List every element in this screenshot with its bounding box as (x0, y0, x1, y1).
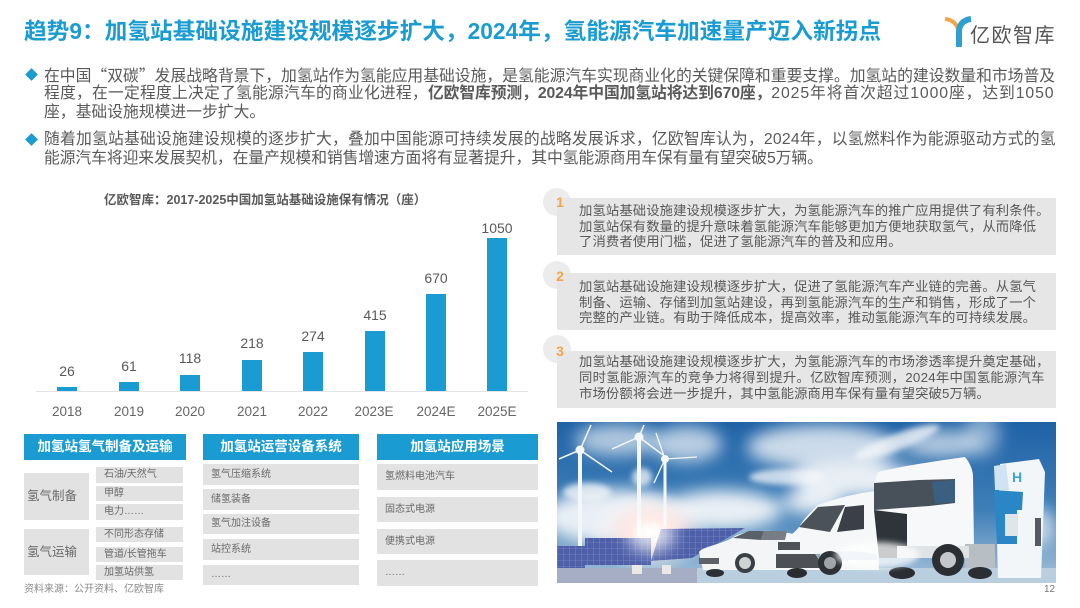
item: 管道/长管拖车 (104, 549, 167, 560)
bullet 2 text: 能源汽车将迎来发展契机，在量产规模和销售增速方面将有显著提升，其中氢能源商用车保有量有望突破5万辆。 (44, 150, 823, 167)
value 1050: 1050 (481, 220, 513, 236)
item (203, 514, 359, 534)
icon: car (699, 531, 797, 577)
logo: 亿欧智库 (944, 16, 1056, 47)
item (377, 464, 538, 490)
item: …… (385, 567, 405, 578)
bar 2019 (119, 382, 139, 391)
value 61: 61 (121, 358, 137, 374)
bullet 1 text: 座，基础设施规模进一步扩大。 (44, 104, 265, 121)
item: 石油/天然气 (104, 469, 157, 480)
item: 固态式电源 (385, 504, 435, 515)
panel: application scenarios (377, 434, 538, 586)
callout 1 text box: 加氢站保有数量的提升意味着氢能源汽车能够更加方便地获取氢气，从而降低 (579, 218, 1036, 234)
bar 2018 (57, 387, 77, 391)
item (377, 560, 538, 586)
icon: hydrogen pump (994, 459, 1045, 578)
item (203, 539, 359, 560)
item (96, 565, 183, 580)
callout 3 (543, 335, 1056, 408)
bar 2023E (365, 331, 385, 391)
bullet 1 text: 程度，在一定程度上决定了氢能源汽车的商业化进程，亿欧智库预测，2024年中国加氢站将达到670座，2025年将首次超过1000座，达到1050 (44, 85, 1054, 102)
item: 氢气压缩系统 (211, 469, 271, 480)
item (96, 467, 183, 483)
callout 2 text box: 制备、运输、存储到加氢站建设，再到氢能源汽车的生产和销售，形成了一个 (579, 294, 1036, 310)
value 26: 26 (59, 363, 75, 379)
icon: solar panels (557, 528, 745, 583)
item (377, 529, 538, 554)
intro bullet 1 (25, 63, 1055, 121)
group: hydrogen transport: 氢气运输 (27, 545, 77, 559)
callout 2 text box: 加氢站基础设施建设规模逐步扩大，促进了氢能源汽车产业链的完善。从氢气 (579, 279, 1036, 294)
panel heading: 加氢站氢气制备及运输 (38, 439, 172, 454)
item: 站控系统 (211, 544, 251, 555)
year 2018: 2018 (52, 404, 82, 419)
panel: operating equipment (203, 434, 359, 585)
callout 3 text box (557, 351, 1056, 408)
item: 便携式电源 (385, 536, 435, 547)
callout 2 (543, 261, 1056, 330)
bar 2021 (242, 360, 262, 391)
item: 氢气加注设备 (211, 518, 271, 529)
item: …… (211, 569, 231, 580)
bar 2020 (180, 375, 200, 391)
chart title: 亿欧智库：2017-2025中国加氢站基础设施保有情况（座） (104, 193, 426, 207)
item (96, 504, 183, 520)
callout 2 text box (557, 273, 1056, 330)
year 2025E: 2025E (477, 404, 517, 419)
bar 2022 (303, 352, 323, 391)
chart axis (36, 391, 528, 392)
callout 1 text box: 了消费者使用门槛，促进了氢能源汽车的普及和应用。 (579, 234, 902, 249)
item (203, 464, 359, 485)
callout 1 text box (557, 198, 1056, 255)
badge circle 2 (543, 261, 571, 289)
badge circle 3 (543, 335, 571, 363)
value 118: 118 (179, 350, 201, 366)
year 2020: 2020 (175, 404, 205, 419)
item (96, 547, 183, 562)
callout 3 text box: 市场份额将会进一步提升，其中氢能源商用车保有量有望突破5万辆。 (579, 386, 990, 401)
panel heading (377, 434, 538, 460)
item (377, 497, 538, 522)
icon: truck (874, 457, 995, 579)
item (96, 527, 183, 542)
item: 储氢装备 (211, 494, 251, 505)
bullet 1 text: 在中国“双碳”发展战略背景下，加氢站作为氢能应用基础设施，是氢能源汽车实现商业化的关键保障和重要支撑。加氢站的建设数量和市场普及 (44, 63, 1055, 86)
group: hydrogen production (24, 473, 89, 520)
page number: 12 (1044, 584, 1055, 595)
number 1: 1 (556, 194, 564, 210)
panel heading: 加氢站应用场景 (410, 439, 505, 454)
item (96, 486, 183, 501)
item: 电力…… (104, 506, 144, 517)
badge circle 1 (543, 188, 571, 216)
value 415: 415 (363, 307, 387, 323)
illustration: wind, solar, hydrogen vehicles (557, 422, 1056, 583)
callout 2 text box: 完整的产业链。有助于降低成本，提高效率，推动氢能源汽车的可持续发展。 (579, 310, 1036, 325)
icon: diamond bullet (25, 68, 38, 81)
panel heading (24, 434, 186, 460)
bullet 2 text: 随着加氢站基础设施建设规模的逐步扩大，叠加中国能源可持续发展的战略发展诉求，亿欧智库认为，2024年，以氢燃料作为能源驱动方式的氢 (44, 131, 1056, 148)
bullet 1 text (44, 63, 1055, 121)
item: 不同形态存储 (104, 529, 164, 540)
year 2019: 2019 (114, 404, 144, 419)
icon: van (776, 491, 879, 578)
number 2: 2 (556, 268, 564, 284)
panel heading (203, 434, 359, 460)
title: 趋势9：加氢站基础设施建设规模逐步扩大，2024年，氢能源汽车加速量产迈入新拐点 (24, 18, 881, 44)
source note: 资料来源：公开资料、亿欧智库 (24, 584, 164, 595)
callout 1 text box: 加氢站基础设施建设规模逐步扩大，为氢能源汽车的推广应用提供了有利条件。 (579, 203, 1050, 218)
callout 3 text box: 同时氢能源汽车的竞争力将得到提升。亿欧智库预测，2024年中国氢能源汽车 (579, 370, 1045, 385)
year 2021: 2021 (237, 404, 267, 419)
bar 2024E (426, 294, 446, 391)
icon: diamond bullet (25, 133, 38, 146)
number 3: 3 (556, 343, 564, 359)
intro bullet 2 (25, 130, 1056, 167)
group: hydrogen transport (24, 529, 89, 575)
callout 3 text box: 加氢站基础设施建设规模逐步扩大，为氢能源汽车的市场渗透率提升奠定基础， (579, 354, 1050, 369)
bar 2025E (487, 238, 507, 391)
item (203, 565, 359, 585)
icon: hydrogen pump: H (1012, 469, 1022, 485)
year 2024E: 2024E (416, 404, 456, 419)
bullet 2 text (44, 130, 1056, 167)
item: 甲醇 (104, 488, 124, 499)
value 670: 670 (424, 270, 448, 286)
item: 加氢站供氢 (104, 567, 154, 578)
panel: production and transport (24, 434, 186, 580)
item (203, 489, 359, 510)
year 2022: 2022 (298, 404, 328, 419)
icon: wind turbines (559, 425, 697, 546)
value 274: 274 (301, 328, 325, 344)
logo: 亿欧智库: 亿欧智库 (970, 25, 1056, 47)
group: hydrogen production: 氢气制备 (27, 489, 77, 503)
value 218: 218 (240, 335, 264, 351)
year 2023E: 2023E (354, 404, 394, 419)
panel heading: 加氢站运营设备系统 (220, 439, 342, 454)
callout 1 (543, 188, 1056, 255)
item: 氢燃料电池汽车 (385, 471, 455, 482)
